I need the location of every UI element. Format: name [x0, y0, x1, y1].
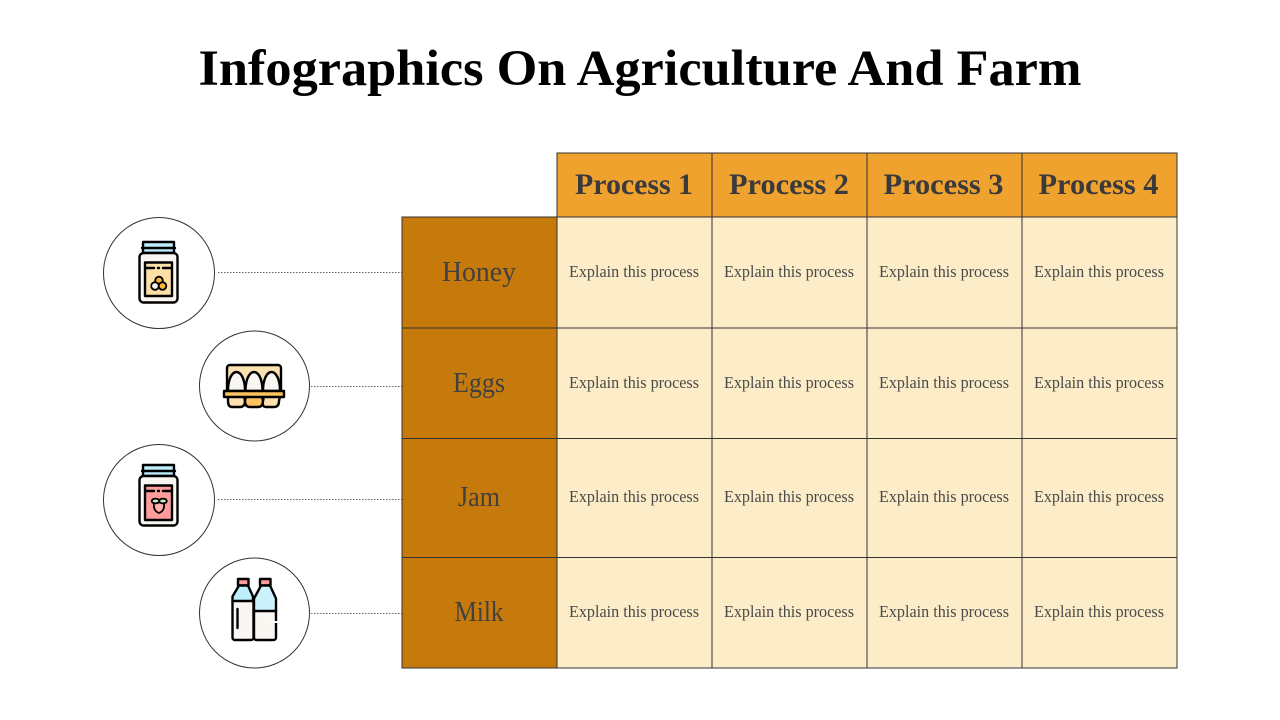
- connector: honey: [218, 272, 402, 274]
- row cells: milk: Explain this process: [569, 602, 699, 621]
- circle: jam: [104, 444, 214, 556]
- row label: eggs: [402, 328, 557, 438]
- connector: milk: [311, 612, 402, 614]
- row label: honey: Honey: [442, 257, 516, 288]
- icon: honey jar: [140, 242, 178, 302]
- row cells: honey: Explain this process: [1034, 262, 1164, 281]
- connector: eggs: [311, 386, 402, 388]
- row cells: jam: Explain this process: [879, 487, 1009, 506]
- row cells: milk: Explain this process: [724, 602, 854, 621]
- title: Infographics On Agriculture And Farm: [198, 41, 1082, 97]
- row label: jam: [402, 438, 557, 558]
- row label: milk: [402, 558, 557, 668]
- row label: honey: [402, 217, 557, 328]
- row cells: honey: Explain this process: [569, 262, 699, 281]
- table: [402, 153, 1177, 668]
- row label: jam: Jam: [458, 482, 500, 513]
- header: process 2: [712, 153, 867, 217]
- header: process 2: Process 2: [729, 168, 849, 201]
- row cells: jam: Explain this process: [724, 487, 854, 506]
- header: process 1: [557, 153, 712, 217]
- header: process 3: [867, 153, 1022, 217]
- row cells: honey: Explain this process: [879, 262, 1009, 281]
- row cells: eggs: Explain this process: [724, 373, 854, 392]
- row cells: milk: Explain this process: [1034, 602, 1164, 621]
- row cells: honey: Explain this process: [724, 262, 854, 281]
- row cells: honey: [557, 217, 1177, 328]
- row cells: milk: Explain this process: [879, 602, 1009, 621]
- row cells: jam: Explain this process: [569, 487, 699, 506]
- row cells: eggs: Explain this process: [1034, 373, 1164, 392]
- header: process 1: Process 1: [575, 168, 693, 201]
- header: process 3: Process 3: [884, 168, 1004, 201]
- row cells: eggs: Explain this process: [879, 373, 1009, 392]
- header: process 4: Process 4: [1038, 168, 1158, 201]
- circle: milk: [200, 558, 310, 668]
- row label: milk: Milk: [454, 597, 504, 628]
- row cells: eggs: Explain this process: [569, 373, 699, 392]
- icon: jam jar: [140, 465, 178, 526]
- circle: honey: [104, 218, 214, 328]
- icon: egg carton: [224, 365, 284, 407]
- row cells: eggs: [557, 328, 1177, 438]
- row cells: jam: Explain this process: [1034, 487, 1164, 506]
- circle: eggs: [200, 331, 310, 441]
- header: process 4: [1022, 153, 1177, 217]
- row label: eggs: Eggs: [453, 368, 505, 399]
- icon: milk bottles: [232, 579, 277, 640]
- row cells: milk: [557, 558, 1177, 668]
- row cells: jam: [557, 438, 1177, 558]
- connector: jam: [218, 498, 402, 500]
